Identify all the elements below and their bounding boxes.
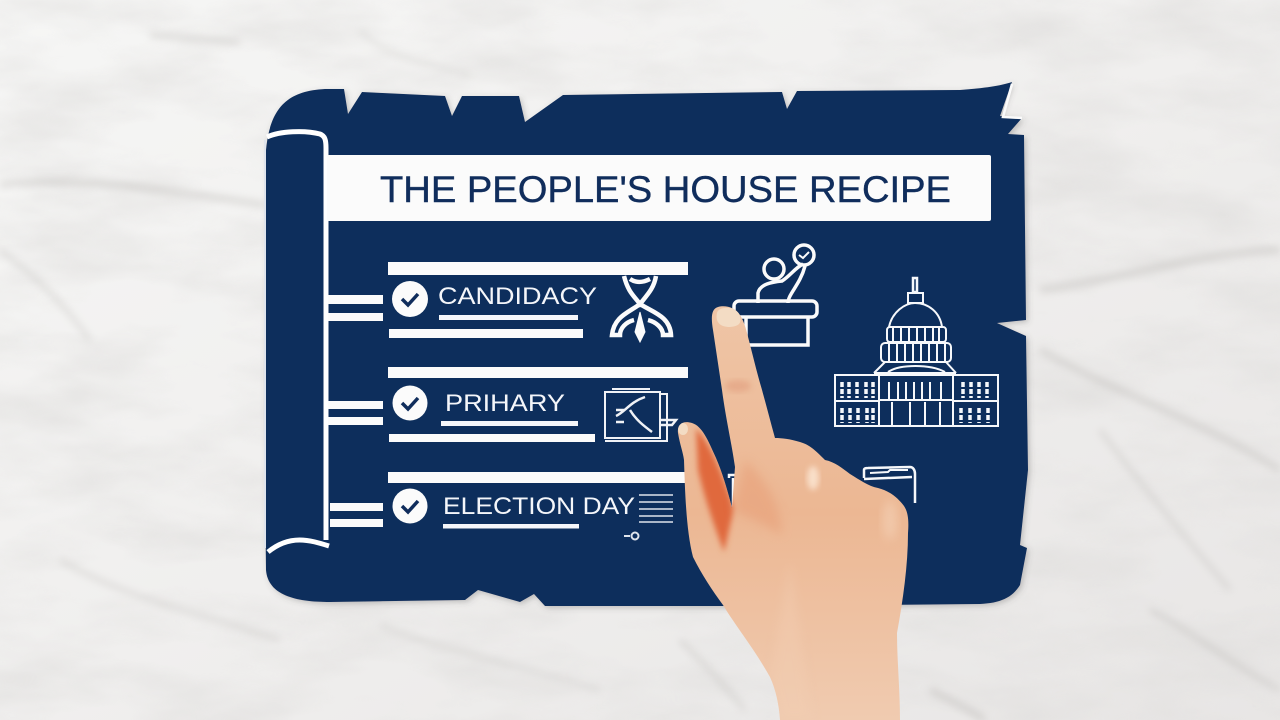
knuckle shading [736,464,780,530]
check icon [392,281,428,317]
fingernail [717,308,740,327]
step: election day [330,472,688,540]
icon: capitol building [835,278,998,426]
thumb shading [696,428,734,552]
hand pointing [678,306,908,720]
label: CANDIDACY [438,283,597,310]
check icon [392,386,428,420]
icon: list lines [624,495,673,540]
icon: ballot box [729,467,915,507]
label: PRIHARY [445,390,565,417]
icon: calendar chart [605,389,676,441]
label: ELECTION DAY [443,493,635,520]
title: THE PEOPLE'S HOUSE RECIPE [380,169,951,210]
step: primary [328,367,688,442]
icon: podium speaker [734,245,817,345]
icon: tie figure [612,276,671,342]
scroll roller [265,132,329,552]
torn corner highlight [1003,84,1022,118]
step: candidacy [328,262,688,342]
navy torn scroll panel [264,82,1028,606]
check icon [392,488,428,524]
title banner [327,155,991,221]
highlights [807,466,819,490]
